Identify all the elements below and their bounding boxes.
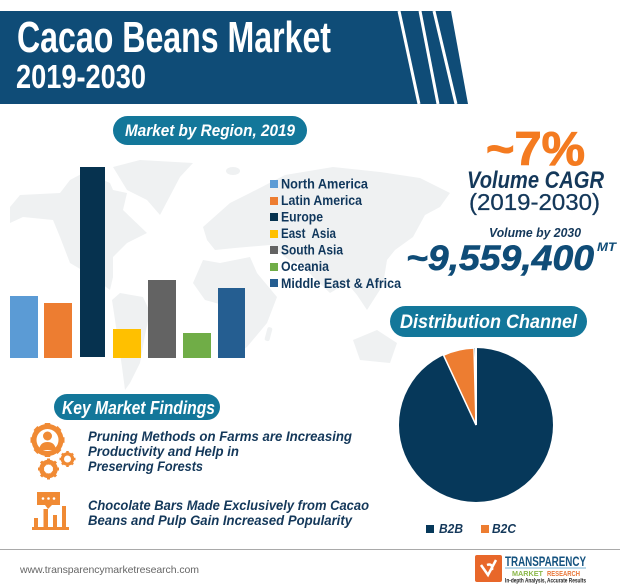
chart legend: North America bbox=[281, 176, 368, 192]
text: finding two: Chocolate Bars Made Exclusively from Cacao bbox=[88, 497, 369, 513]
title: Cacao Beans Market bbox=[17, 13, 331, 62]
pill heading: market by region bbox=[113, 116, 307, 145]
world map background bbox=[10, 160, 450, 390]
volume callout: Volume by 2030 bbox=[489, 225, 582, 240]
text: finding two bbox=[88, 497, 369, 528]
subtitle years: 2019-2030 bbox=[16, 58, 146, 95]
pie legend bbox=[426, 521, 517, 536]
volume callout: ~9,559,400 bbox=[406, 239, 595, 278]
pie legend: B2B bbox=[439, 521, 463, 536]
CAGR callout: ~7% bbox=[486, 122, 585, 175]
icon: chart with speech bubble bbox=[32, 492, 69, 530]
icon: gears with person bbox=[30, 423, 76, 480]
chart legend: Oceania bbox=[281, 259, 329, 274]
logo bbox=[475, 553, 587, 584]
pill heading: key market findings bbox=[54, 394, 220, 420]
chart legend: Latin America bbox=[281, 193, 362, 208]
text: finding two: Beans and Pulp Gain Increased Popularity bbox=[88, 512, 353, 528]
text: finding one: Productivity and Help in bbox=[88, 443, 239, 459]
logo: In-depth Analysis, Accurate Results bbox=[505, 578, 587, 584]
volume callout: MT bbox=[597, 240, 618, 254]
volume callout bbox=[406, 225, 618, 278]
text: finding one: Preserving Forests bbox=[88, 458, 203, 474]
pill heading: market by region: Market by Region, 2019 bbox=[125, 122, 296, 140]
pill heading: key market findings: Key Market Findings bbox=[62, 398, 215, 418]
text: finding one bbox=[88, 428, 352, 474]
chart legend: East Asia bbox=[281, 226, 336, 241]
pie legend: B2C bbox=[492, 521, 517, 536]
chart legend: South Asia bbox=[281, 242, 343, 258]
logo: TRANSPARENCY bbox=[505, 553, 586, 569]
chart legend: Europe bbox=[281, 210, 323, 224]
footer divider bbox=[0, 549, 620, 550]
logo: MARKET bbox=[512, 569, 543, 578]
bar chart bbox=[10, 167, 245, 358]
header banner bbox=[0, 11, 468, 104]
chart legend bbox=[270, 176, 401, 291]
chart legend: Middle East & Africa bbox=[281, 276, 401, 291]
logo: RESEARCH bbox=[547, 569, 580, 578]
CAGR callout bbox=[467, 122, 605, 215]
pie chart bbox=[399, 348, 553, 502]
pill heading: distribution channel: Distribution Channel bbox=[400, 312, 578, 333]
pill heading: distribution channel bbox=[390, 306, 587, 337]
CAGR callout: (2019-2030) bbox=[469, 189, 600, 215]
website url: www.transparencymarketresearch.com bbox=[19, 564, 199, 576]
text: finding one: Pruning Methods on Farms are Increasing bbox=[88, 428, 352, 444]
